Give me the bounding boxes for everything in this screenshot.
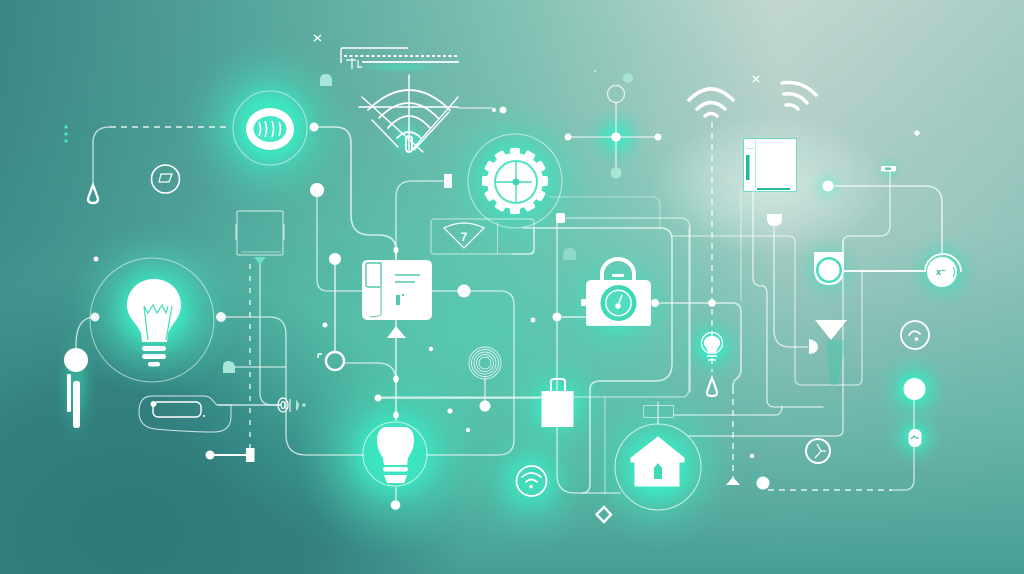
icon: clock badge xyxy=(806,439,830,463)
icon: large light bulb xyxy=(90,258,214,382)
bowl pendant xyxy=(767,214,782,226)
end dot with tail xyxy=(748,465,770,490)
joint dots on vertical line xyxy=(329,246,470,419)
spiral coil xyxy=(469,347,501,412)
cross marks xyxy=(314,35,759,82)
icon: small bulb xyxy=(702,332,722,360)
dot on bulb ring xyxy=(90,312,226,322)
ruler device xyxy=(341,48,459,69)
left sensor column xyxy=(64,348,88,428)
icon: shopping bag xyxy=(542,379,574,427)
icon: wifi circle xyxy=(516,466,546,496)
connector plug xyxy=(444,174,452,188)
icon: drop pendant left xyxy=(88,185,98,203)
icon: wifi badge right xyxy=(901,321,929,349)
side dot xyxy=(822,180,834,192)
small triangle marker xyxy=(726,477,740,485)
icon: round badge xyxy=(152,165,180,193)
small dumbbell connector xyxy=(206,448,254,462)
triangle under device xyxy=(387,326,406,338)
small panel with number: 7 xyxy=(461,230,468,244)
wifi fan antenna xyxy=(359,75,506,152)
ring device xyxy=(814,252,844,285)
small dots xyxy=(64,70,920,458)
icon: home circle xyxy=(615,424,701,510)
light blobs xyxy=(223,74,576,373)
joint dots near padlock xyxy=(552,213,716,322)
wifi symbol two xyxy=(782,82,816,109)
icon: drop pendant center xyxy=(707,378,717,396)
ring joint xyxy=(318,352,344,370)
connector lines xyxy=(76,102,942,493)
icon: gear with clock xyxy=(468,134,562,228)
small rectangle on home xyxy=(644,406,674,418)
icon: down triangle with shadow xyxy=(815,320,847,385)
right sensor with pill xyxy=(904,378,926,447)
wifi symbol one xyxy=(689,89,733,116)
pill capsule sensor xyxy=(139,396,231,432)
icon: diamond xyxy=(596,507,611,522)
round dial device xyxy=(925,254,961,287)
plug tip xyxy=(881,166,896,172)
small square frame xyxy=(236,211,284,265)
small panel with number xyxy=(431,219,534,254)
icon: padlock device xyxy=(581,259,651,326)
round dial device: x⁻ xyxy=(936,267,946,277)
icon: lower bulb xyxy=(363,422,427,510)
central device box xyxy=(362,260,432,320)
smart fridge box xyxy=(743,138,797,192)
dashed lines xyxy=(110,122,892,490)
icon: sound sensor circle xyxy=(233,91,318,165)
half disc plug xyxy=(809,339,818,354)
bright dot joint xyxy=(310,183,324,197)
cross network node xyxy=(564,73,662,178)
coil signal xyxy=(278,398,306,412)
